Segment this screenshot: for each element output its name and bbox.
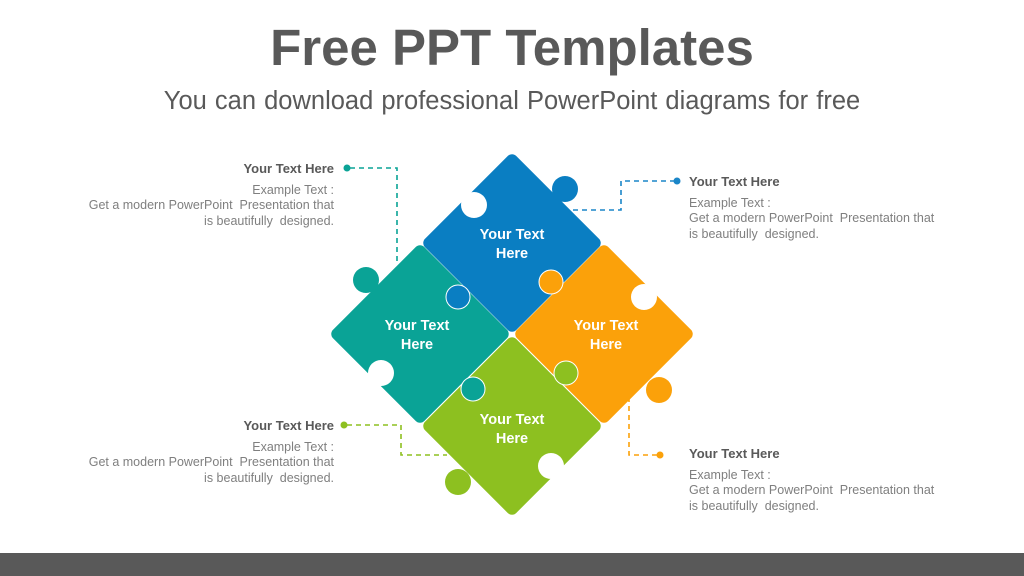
text block: bottom right: Get a modern PowerPoint Presentation that bbox=[689, 483, 934, 497]
text block: top left: Example Text : bbox=[252, 182, 334, 196]
text block: top right: Your Text Here bbox=[689, 174, 780, 189]
piece labels: Your Text bbox=[385, 318, 450, 334]
text block: bottom left: Get a modern PowerPoint Presentation that bbox=[89, 455, 334, 469]
piece: green bbox=[421, 335, 603, 517]
piece: teal bbox=[329, 243, 511, 425]
piece labels: Here bbox=[496, 246, 528, 262]
title: Free PPT Templates bbox=[270, 19, 754, 76]
text block: bottom left bbox=[89, 418, 334, 484]
piece labels: Here bbox=[401, 337, 433, 353]
piece labels: Your Text bbox=[480, 412, 545, 428]
footer bar bbox=[0, 553, 1024, 576]
text block: top right bbox=[689, 174, 934, 240]
text block: top right: Example Text : bbox=[689, 196, 771, 210]
text block: top left bbox=[89, 161, 334, 228]
piece: orange bbox=[513, 243, 695, 425]
piece: blue bbox=[421, 152, 603, 334]
piece labels: Here bbox=[590, 337, 622, 353]
subtitle: You can download professional PowerPoint diagrams for free bbox=[164, 87, 860, 115]
text block: bottom left: Your Text Here bbox=[243, 418, 334, 433]
piece labels bbox=[385, 227, 639, 447]
connectors bbox=[347, 168, 675, 455]
text block: bottom right: Your Text Here bbox=[689, 446, 780, 461]
inner knobs bbox=[446, 270, 578, 401]
text block: bottom right: is beautifully designed. bbox=[689, 498, 819, 512]
text block: top left: Get a modern PowerPoint Presentation that bbox=[89, 198, 334, 212]
holes bbox=[368, 192, 657, 479]
piece labels: Here bbox=[496, 431, 528, 447]
text block: top right: is beautifully designed. bbox=[689, 226, 819, 240]
text block: bottom left: Example Text : bbox=[252, 440, 334, 454]
text block: top left: is beautifully designed. bbox=[204, 214, 334, 228]
text block: top right: Get a modern PowerPoint Presentation that bbox=[689, 211, 934, 225]
piece labels: Your Text bbox=[480, 227, 545, 243]
text block: bottom left: is beautifully designed. bbox=[204, 470, 334, 484]
text block: bottom right bbox=[689, 446, 934, 512]
piece labels: Your Text bbox=[574, 318, 639, 334]
text block: top left: Your Text Here bbox=[243, 161, 334, 176]
text block: bottom right: Example Text : bbox=[689, 468, 771, 482]
